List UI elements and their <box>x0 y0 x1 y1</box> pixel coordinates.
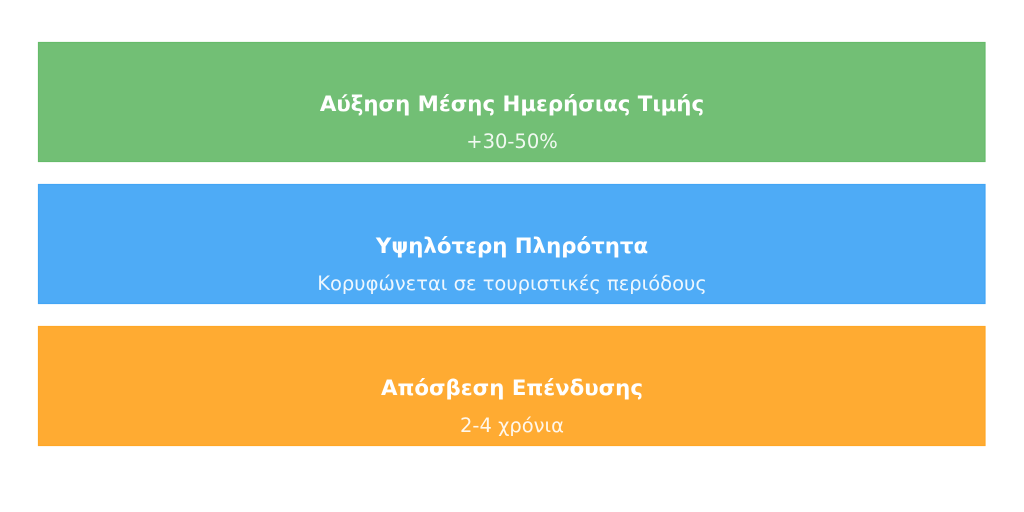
heading: investment payback: Απόσβεση Επένδυσης <box>381 376 643 401</box>
panel: investment payback <box>38 326 985 446</box>
heading: average daily rate increase: Αύξηση Μέσης Ημερήσιας Τιμής <box>320 92 704 117</box>
panel: higher occupancy <box>38 184 985 304</box>
value: occupancy peak: Κορυφώνεται σε τουριστικές περιόδους <box>317 272 707 295</box>
value: payback period: 2-4 χρόνια <box>460 414 564 437</box>
value: rate increase: +30-50% <box>466 130 558 153</box>
heading: higher occupancy: Υψηλότερη Πληρότητα <box>375 234 648 259</box>
panel: average daily rate increase <box>38 42 985 162</box>
